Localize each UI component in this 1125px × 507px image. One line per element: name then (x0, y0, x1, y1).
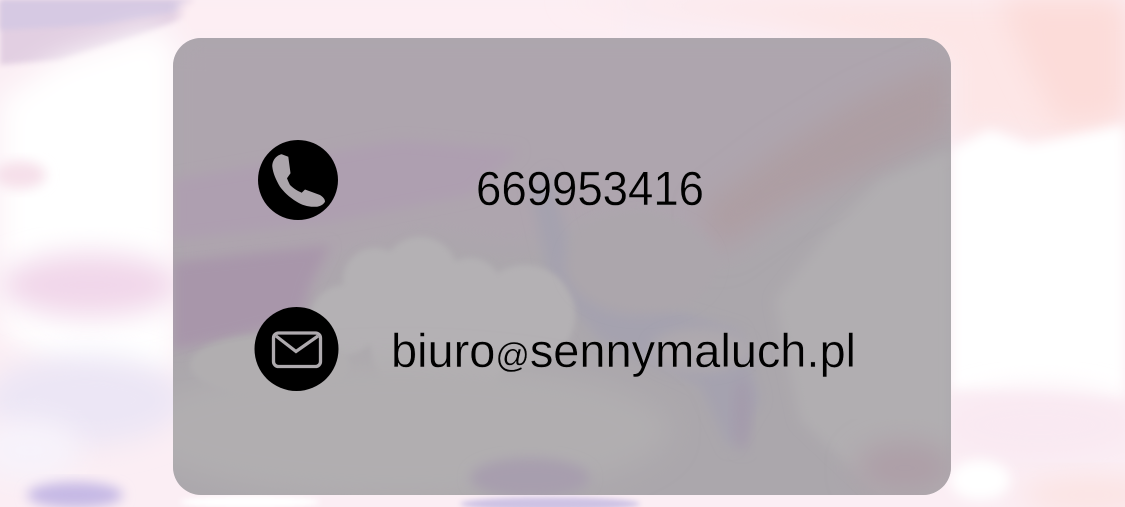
icon: phone (258, 140, 338, 220)
email address: biuro@sennymaluch.pl (391, 324, 856, 377)
cloud in card (198, 239, 574, 360)
icon: envelope (254, 307, 338, 391)
phone number: 669953416 (476, 163, 704, 216)
panel: contact card (130, 38, 955, 500)
